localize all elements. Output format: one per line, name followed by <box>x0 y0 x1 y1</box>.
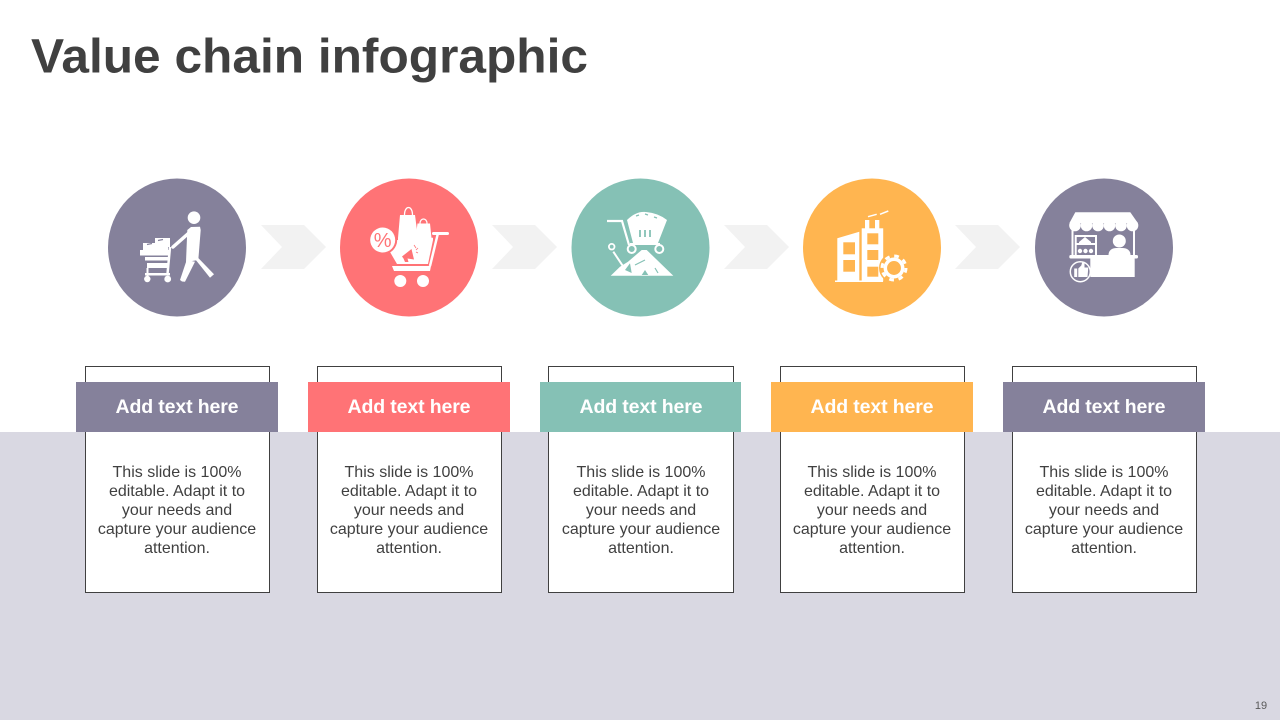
page number: 19 <box>1255 700 1267 712</box>
card 5 text: your needs and <box>1049 502 1159 519</box>
card 3 heading: Add text here <box>580 396 703 418</box>
card 4 text: editable. Adapt it to <box>804 483 940 500</box>
card 3 text: editable. Adapt it to <box>573 483 709 500</box>
card 2 heading: Add text here <box>348 396 471 418</box>
card 3 header <box>540 382 741 432</box>
step 2 icon: shopping cart with bags and discount <box>340 178 478 316</box>
card 1 heading: Add text here <box>116 396 239 418</box>
arrow: chevron 3 <box>724 225 789 269</box>
card 4 body <box>780 366 964 592</box>
card 1 text: editable. Adapt it to <box>109 483 245 500</box>
card 2 header <box>308 382 510 432</box>
card 3 <box>540 366 741 592</box>
card 2 body <box>318 366 502 592</box>
card 5 header <box>1003 382 1205 432</box>
card 2 text: your needs and <box>354 502 464 519</box>
card 4 text: attention. <box>839 540 905 557</box>
card 4 header <box>771 382 973 432</box>
card 5 text: editable. Adapt it to <box>1036 483 1172 500</box>
arrow: chevron 1 <box>261 225 326 269</box>
card 2 text: capture your audience <box>330 521 488 538</box>
card 2 text: This slide is 100% <box>345 464 473 481</box>
card 1 text: capture your audience <box>98 521 256 538</box>
arrow: chevron 4 <box>955 225 1020 269</box>
card 1 text: your needs and <box>122 502 232 519</box>
card 1 <box>76 366 278 592</box>
card 2 text: attention. <box>376 540 442 557</box>
card 5 text: This slide is 100% <box>1040 464 1168 481</box>
card 4 text: This slide is 100% <box>808 464 936 481</box>
step 5 icon: market stall with thumbs up <box>1035 178 1173 316</box>
card 5 body <box>1012 366 1196 592</box>
step 1 icon: shopper pushing cart <box>108 178 246 316</box>
card 4 <box>771 366 973 592</box>
card 5 text: attention. <box>1071 540 1137 557</box>
arrow: chevron 2 <box>492 225 557 269</box>
card 5 text: capture your audience <box>1025 521 1183 538</box>
card 3 text: attention. <box>608 540 674 557</box>
card 3 text: capture your audience <box>562 521 720 538</box>
card 2 text: editable. Adapt it to <box>341 483 477 500</box>
card 4 text: your needs and <box>817 502 927 519</box>
step 2 icon: shopping cart with bags and discount: % <box>374 230 392 252</box>
card 1 header <box>76 382 278 432</box>
step 3 icon: coal cart, shovel and pile <box>572 178 710 316</box>
card 2 <box>308 366 510 592</box>
step 4 icon: factory building with gear <box>803 178 941 316</box>
card 4 heading: Add text here <box>810 396 934 418</box>
card 3 body <box>548 366 734 592</box>
card 1 text: attention. <box>144 540 210 557</box>
card 1 body <box>86 366 270 592</box>
card 1 text: This slide is 100% <box>113 464 241 481</box>
card 5 heading: Add text here <box>1042 396 1166 418</box>
card 3 text: your needs and <box>586 502 696 519</box>
card 3 text: This slide is 100% <box>577 464 705 481</box>
card 5 <box>1003 366 1205 592</box>
card 4 text: capture your audience <box>793 521 951 538</box>
title: Value chain infographic <box>31 30 588 84</box>
